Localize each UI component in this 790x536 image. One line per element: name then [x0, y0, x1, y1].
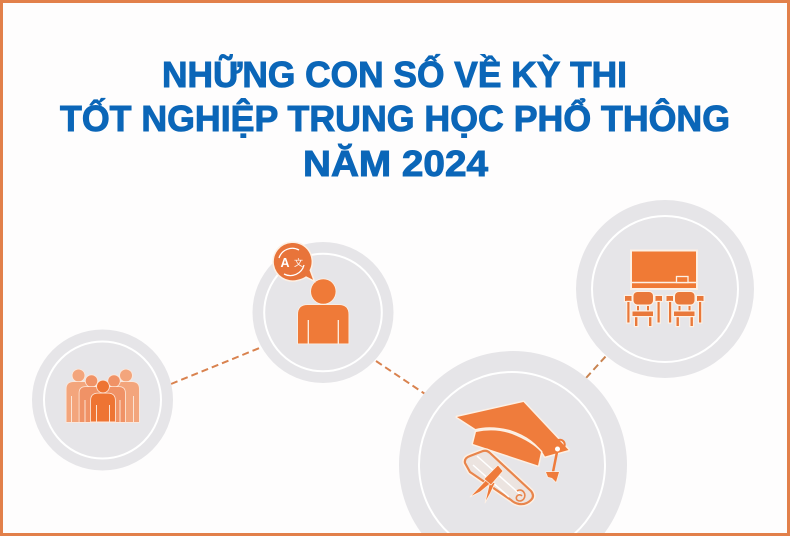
icon: group of people — [66, 370, 139, 422]
title: NĂM 2024 — [303, 143, 489, 184]
circle: classroom — [576, 200, 754, 378]
connector: language to graduation — [376, 361, 425, 394]
title: TỐT NGHIỆP TRUNG HỌC PHỔ THÔNG — [60, 96, 730, 139]
icon: translation speech bubble: 文 — [294, 257, 303, 268]
connector: candidates to language — [171, 347, 262, 384]
connector: graduation to classroom — [586, 356, 606, 378]
icon: desk and chair right — [666, 292, 704, 326]
circle: graduation — [399, 351, 627, 536]
icon: blackboard — [632, 252, 696, 288]
title — [60, 53, 730, 184]
icon: person — [298, 279, 348, 344]
circle: language candidate — [252, 242, 394, 383]
title: NHỮNG CON SỐ VỀ KỲ THI — [162, 53, 627, 95]
icon: diploma scroll — [465, 451, 533, 504]
icon: desk and chair left — [625, 292, 662, 326]
circle: candidates group — [32, 330, 173, 470]
icon: translation speech bubble: A — [280, 256, 290, 270]
icon: graduation cap — [457, 402, 568, 482]
icon: translation speech bubble — [274, 243, 313, 280]
